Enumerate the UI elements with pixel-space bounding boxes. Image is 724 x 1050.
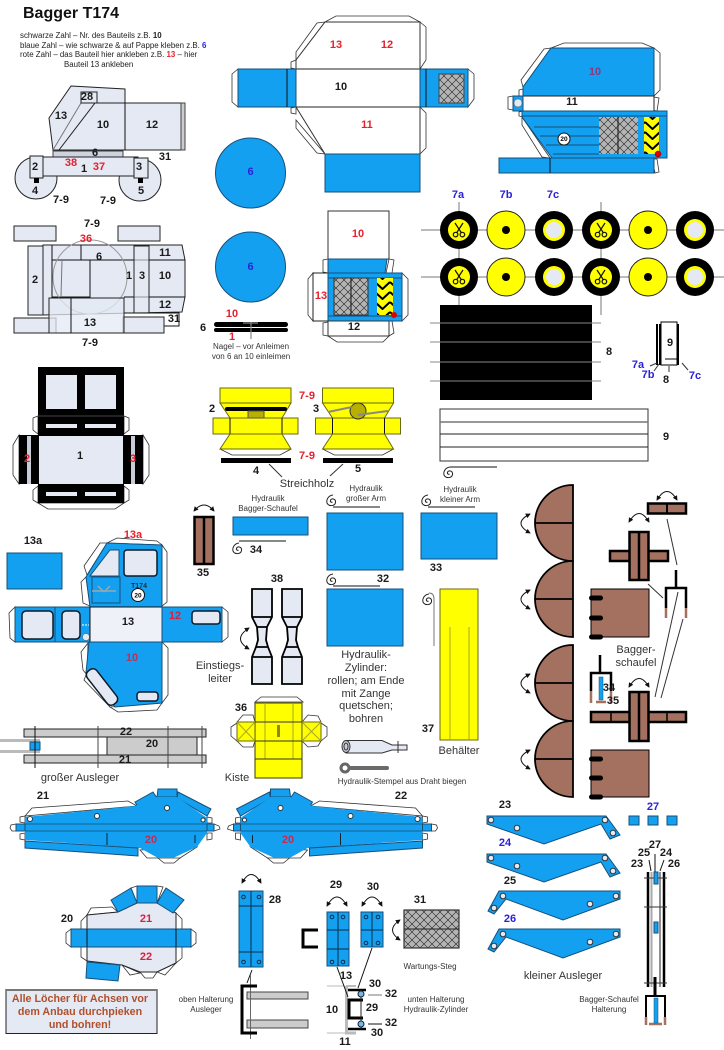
cab net 13a: T174 <box>131 583 147 590</box>
lower cylinder mount: 32 <box>385 988 397 1000</box>
side view assembly <box>15 86 185 207</box>
nail detail <box>200 308 290 361</box>
side view assembly: 13 <box>55 110 67 122</box>
part 8 black strips <box>430 305 612 400</box>
part 6 circles: 6 <box>247 261 254 273</box>
net: top body 10 11 12 13 <box>232 16 474 192</box>
callout: drill warning <box>6 990 157 1034</box>
top view assembly: 31 <box>168 313 180 325</box>
part 6 circles: 6 <box>247 166 254 178</box>
top view assembly <box>14 218 185 349</box>
cab net 13a: 13a <box>24 535 43 547</box>
nail detail: von 6 an 10 einleimen <box>212 352 290 361</box>
hydraulic part 33 small arm <box>421 485 497 574</box>
part 30 <box>361 881 383 947</box>
net: side body 10: 20 <box>560 136 568 143</box>
top view assembly: 2 <box>32 274 38 286</box>
part 8 black strips: 8 <box>606 346 612 358</box>
small boom assembly: 23 <box>631 858 643 870</box>
part 21 boom side <box>10 789 220 863</box>
lower cylinder mount: 30 <box>371 1027 383 1039</box>
cylinder instruction: Hydraulik- <box>341 649 391 661</box>
part 9 strips: 9 <box>663 431 669 443</box>
small boom assembly: 24 <box>660 847 673 859</box>
small boom parts 23 24 25 26: kleiner Ausleger <box>524 970 602 982</box>
net: top body 10 11 12 13: 12 <box>381 39 393 51</box>
boom labels 21: 21 <box>37 790 49 802</box>
lower cylinder mount: 10 <box>326 1004 338 1016</box>
legend text: schwarze Zahl – Nr. des Bauteils z.B. 10 <box>20 31 162 40</box>
upper boom mount <box>179 970 308 1039</box>
hydraulic part 34 <box>233 494 308 556</box>
boom labels 22: 20 <box>282 834 294 846</box>
big boom top view: 20 <box>146 738 158 750</box>
part 28 <box>239 874 281 967</box>
part 20 net: 21 <box>140 913 152 925</box>
lower cylinder mount: 13 <box>340 970 352 982</box>
wheel parts 7a 7b 7c: 7b <box>500 189 513 201</box>
net: top body 10 11 12 13: 11 <box>361 119 373 131</box>
matchstick label: Streichholz <box>280 478 334 490</box>
top view assembly: 3 <box>139 270 145 282</box>
hydraulic part 33 small arm: Hydraulik <box>443 485 478 494</box>
cylinder instruction: mit Zange <box>342 688 390 700</box>
chassis net 1: 3 <box>130 453 136 465</box>
side view assembly: 31 <box>159 151 171 163</box>
side view assembly: 1 <box>81 163 87 175</box>
part 36 box: Kiste <box>225 772 249 784</box>
part 37 container: 37 <box>422 723 434 735</box>
part 31 walkway: 31 <box>414 894 426 906</box>
net: fold piece 10 12 13: 13 <box>315 290 327 302</box>
matchstick label <box>269 464 343 490</box>
callout: drill warning: und bohren! <box>49 1019 111 1031</box>
small boom parts 23 24 25 26: 26 <box>504 913 516 925</box>
side view assembly: 37 <box>93 161 105 173</box>
nail detail: 6 <box>200 322 206 334</box>
hydraulic part 33 small arm: kleiner Arm <box>440 495 480 504</box>
small boom assembly: 25 <box>638 847 650 859</box>
axle part 3 and 5: 7-9 <box>299 450 315 462</box>
part 35 folded strip <box>194 505 214 579</box>
boom labels 21: 20 <box>145 834 157 846</box>
boom labels 22 <box>282 790 407 846</box>
hydraulic part 34: Hydraulik <box>251 494 286 503</box>
part 6 circles <box>216 138 286 302</box>
lower cylinder mount: 11 <box>339 1036 351 1048</box>
cab net 13a: 13 <box>122 616 134 628</box>
legend text: Bauteil 13 ankleben <box>64 60 133 69</box>
net: fold piece 10 12 13: 10 <box>352 228 364 240</box>
lower cylinder mount: 29 <box>366 1002 378 1014</box>
top view assembly: 36 <box>80 233 92 245</box>
part 36 box: 36 <box>235 702 247 714</box>
lower cylinder mount: 30 <box>369 978 381 990</box>
hydraulic part 32 big arm: 32 <box>377 573 389 585</box>
cab net 13a: 12 <box>169 610 181 622</box>
top view assembly: 13 <box>84 317 96 329</box>
cab net 13a: 13a <box>124 529 143 541</box>
legend text: rote Zahl – das Bauteil hier ankleben z.B. 13 – hier <box>20 50 198 59</box>
part 38 ladders <box>196 573 302 685</box>
part 30: 30 <box>367 881 379 893</box>
small boom assembly <box>579 839 680 1025</box>
bucket sheet upper <box>589 589 649 640</box>
side view assembly: 12 <box>146 119 158 131</box>
cylinder instruction: quetschen; <box>339 700 393 712</box>
top view assembly: 7-9 <box>84 218 100 230</box>
net: fold piece 10 12 13 <box>308 211 408 342</box>
part 27 squares <box>629 801 677 825</box>
hydraulic part 32 big arm <box>327 484 403 646</box>
lower cylinder mount: unten Halterung <box>408 995 464 1004</box>
top view assembly: 12 <box>159 299 171 311</box>
part 31 walkway: Wartungs-Steg <box>403 962 457 971</box>
boom labels 22: 22 <box>395 790 407 802</box>
legend text <box>20 31 207 69</box>
hydraulic part 34: 34 <box>250 544 263 556</box>
chassis net 1 <box>13 367 149 509</box>
axle part 2 and 4 <box>209 388 298 477</box>
cab net 13a: 20 <box>134 592 142 600</box>
part 27 squares: 27 <box>647 801 659 813</box>
bucket cross part upper <box>610 514 668 580</box>
part 20 net <box>61 886 196 981</box>
small boom assembly: 26 <box>668 858 680 870</box>
small boom assembly: Halterung <box>592 1005 626 1014</box>
nail detail: 1 <box>229 331 235 343</box>
cylinder instruction: Zylinder: <box>345 662 387 674</box>
net: side body 10: 10 <box>589 66 601 78</box>
big boom top view <box>0 726 206 784</box>
side view assembly: 10 <box>97 119 109 131</box>
axle part 2 and 4: 2 <box>209 403 215 415</box>
nail detail: Nagel – vor Anleimen <box>213 342 289 351</box>
cylinder instruction: bohren <box>349 713 383 725</box>
hydraulic cylinder and piston: Hydraulik-Stempel aus Draht biegen <box>338 777 466 786</box>
side view assembly: 4 <box>32 185 39 197</box>
bucket cross part lower <box>591 678 686 741</box>
cab net 13a: 10 <box>126 652 138 664</box>
bucket sheet lower <box>589 750 649 800</box>
lower cylinder mount <box>326 948 469 1048</box>
top view assembly: 11 <box>159 247 171 259</box>
wheel cross-section: 7b <box>642 369 655 381</box>
small fork with 34 35 <box>591 655 619 707</box>
nail detail: 10 <box>226 308 238 320</box>
bracket C <box>303 930 318 947</box>
small fork with 34 35: 35 <box>607 695 619 707</box>
hydraulic part 33 small arm: 33 <box>430 562 442 574</box>
wheel cross-section: 9 <box>667 337 673 349</box>
small boom parts 23 24 25 26 <box>487 799 620 982</box>
side view assembly: 28 <box>81 91 93 103</box>
upper boom mount: oben Halterung <box>179 995 233 1004</box>
hydraulic cylinder and piston <box>338 740 466 786</box>
axle part 2 and 4: 4 <box>253 465 260 477</box>
part 28: 28 <box>269 894 281 906</box>
part 36 box <box>225 697 327 784</box>
callout: drill warning: dem Anbau durchpieken <box>18 1006 142 1018</box>
axle part 3 and 5: 5 <box>355 463 361 475</box>
net: fold piece 10 12 13: 12 <box>348 321 360 333</box>
lower cylinder mount: 32 <box>385 1017 397 1029</box>
net: top body 10 11 12 13: 10 <box>335 81 347 93</box>
hydraulic part 32 big arm: Hydraulik <box>349 484 384 493</box>
small boom assembly: Bagger-Schaufel <box>579 995 639 1004</box>
small boom parts 23 24 25 26: 25 <box>504 875 516 887</box>
big boom top view: 21 <box>119 754 131 766</box>
top view assembly: 10 <box>159 270 171 282</box>
side view assembly: 7-9 <box>53 194 69 206</box>
boom labels 21 <box>37 790 157 846</box>
net: side body 10 <box>499 43 667 173</box>
bucket upper small part <box>648 492 686 514</box>
upper boom mount: Ausleger <box>190 1005 222 1014</box>
side view assembly: 6 <box>92 147 98 159</box>
small fork with 34 35: 34 <box>603 682 616 694</box>
top view assembly: 1 <box>126 270 132 282</box>
wheel cross-section: 7c <box>689 370 701 382</box>
wheel cross-section: 8 <box>663 374 669 386</box>
lower cylinder mount: Hydraulik-Zylinder <box>404 1005 469 1014</box>
side view assembly: 38 <box>65 157 77 169</box>
axle part 3 and 5: 7-9 <box>299 390 315 402</box>
wheel parts 7a 7b 7c: 7c <box>547 189 559 201</box>
side view assembly: 3 <box>136 161 142 173</box>
part 37 container <box>422 589 480 757</box>
bucket half discs <box>521 485 573 797</box>
small boom assembly: 27 <box>649 839 661 851</box>
part 22 boom side <box>228 789 438 863</box>
small boom parts 23 24 25 26: 23 <box>499 799 511 811</box>
part 37 container: Behälter <box>439 745 480 757</box>
part 29: 29 <box>330 879 342 891</box>
part 9 strips <box>440 409 669 478</box>
part 38 ladders: leiter <box>208 673 232 685</box>
net: top body 10 11 12 13: 13 <box>330 39 342 51</box>
chassis net 1: 1 <box>77 450 83 462</box>
part 31 walkway <box>392 894 459 971</box>
side view assembly: 2 <box>32 161 38 173</box>
legend text: blaue Zahl – wie schwarze & auf Pappe kleben z.B. 6 <box>20 41 207 50</box>
part 38 ladders: 38 <box>271 573 283 585</box>
part 29 <box>327 879 349 966</box>
side view assembly: 5 <box>138 185 144 197</box>
bucket fork assembly <box>616 519 686 698</box>
wheel parts 7a 7b 7c: 7a <box>452 189 465 201</box>
top view assembly: 7-9 <box>82 337 98 349</box>
hydraulic part 32 big arm: großer Arm <box>346 494 386 503</box>
part 20 net: 22 <box>140 951 152 963</box>
cylinder instruction: rollen; am Ende <box>327 675 405 687</box>
cylinder instruction <box>327 649 405 725</box>
big boom top view: großer Ausleger <box>41 772 119 784</box>
wheel cross-section <box>632 322 701 386</box>
side view assembly: 7-9 <box>100 195 116 207</box>
axle part 3 and 5: 3 <box>313 403 319 415</box>
bucket fork assembly: schaufel <box>616 657 656 669</box>
big boom top view: 22 <box>120 726 132 738</box>
callout: drill warning: Alle Löcher für Achsen vor <box>12 993 148 1005</box>
bucket fork assembly: Bagger- <box>616 644 656 656</box>
wheel cross-section: 7a <box>632 359 645 371</box>
chassis net 1: 2 <box>24 453 30 465</box>
part 38 ladders: Einstiegs- <box>196 660 244 672</box>
title: Bagger T174 <box>23 5 119 22</box>
part 20 net: 20 <box>61 913 73 925</box>
cab net 13a <box>7 529 228 712</box>
small boom parts 23 24 25 26: 24 <box>499 837 512 849</box>
axle part 3 and 5 <box>299 388 400 475</box>
net: side body 10: 11 <box>566 96 578 108</box>
part 35 folded strip: 35 <box>197 567 209 579</box>
top view assembly: 6 <box>96 251 102 263</box>
hydraulic part 34: Bagger-Schaufel <box>238 504 298 513</box>
wheel parts 7a 7b 7c <box>421 189 724 315</box>
